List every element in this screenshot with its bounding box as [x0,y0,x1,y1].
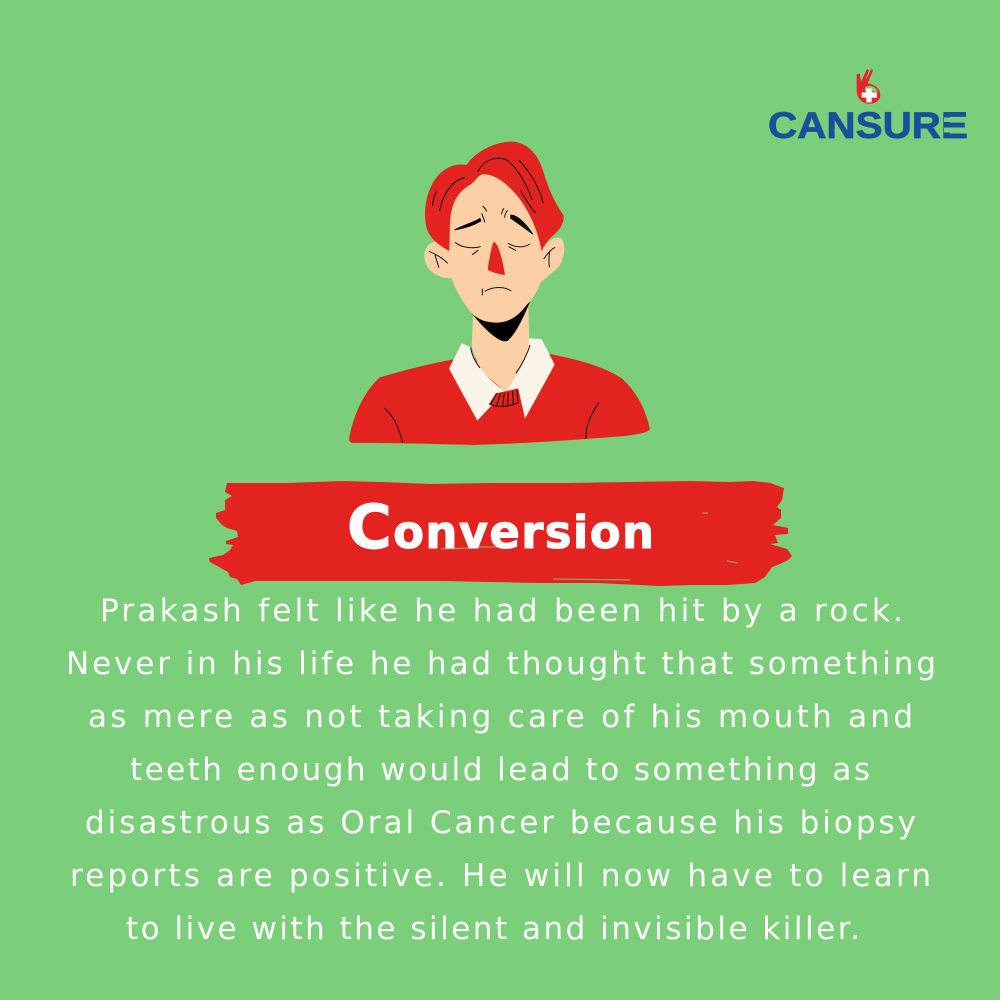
icon: hand OK sign with cross [857,68,880,104]
body text: as mere as not taking care of his mouth and [88,699,913,735]
body text: disastrous as Oral Cancer because his biopsy [85,805,916,841]
collar [449,343,505,421]
knit neckline [489,389,519,406]
body text [66,593,936,947]
body text: Never in his life he had thought that something [66,646,936,682]
neck shadow [472,302,530,341]
neck lines [471,345,530,373]
body and neck [349,303,650,445]
neck [472,303,540,392]
nose [488,242,505,275]
heading text: Conversion [347,492,654,563]
body text: teeth enough would lead to something as [130,752,870,788]
hair strands [433,158,543,213]
eyebrows [454,218,481,230]
closed eyes [455,242,530,255]
heading banner: Conversion [209,481,792,586]
face [449,165,545,323]
body text: Prakash felt like he had been hit by a rock. [100,593,903,629]
arm lines [384,402,599,443]
hair [425,142,564,252]
ears [424,241,452,278]
brush stroke [209,481,792,586]
wordmark: CANSURE [768,105,968,146]
body text: to live with the silent and invisible killer. [126,911,860,947]
head [424,142,564,341]
body text: reports are positive. He will now have to learn [70,858,931,894]
logo: Cansure [768,68,968,146]
sweater [349,354,650,445]
illustration: sad man [349,142,650,445]
mouth [482,288,511,295]
forehead creases [482,206,508,222]
